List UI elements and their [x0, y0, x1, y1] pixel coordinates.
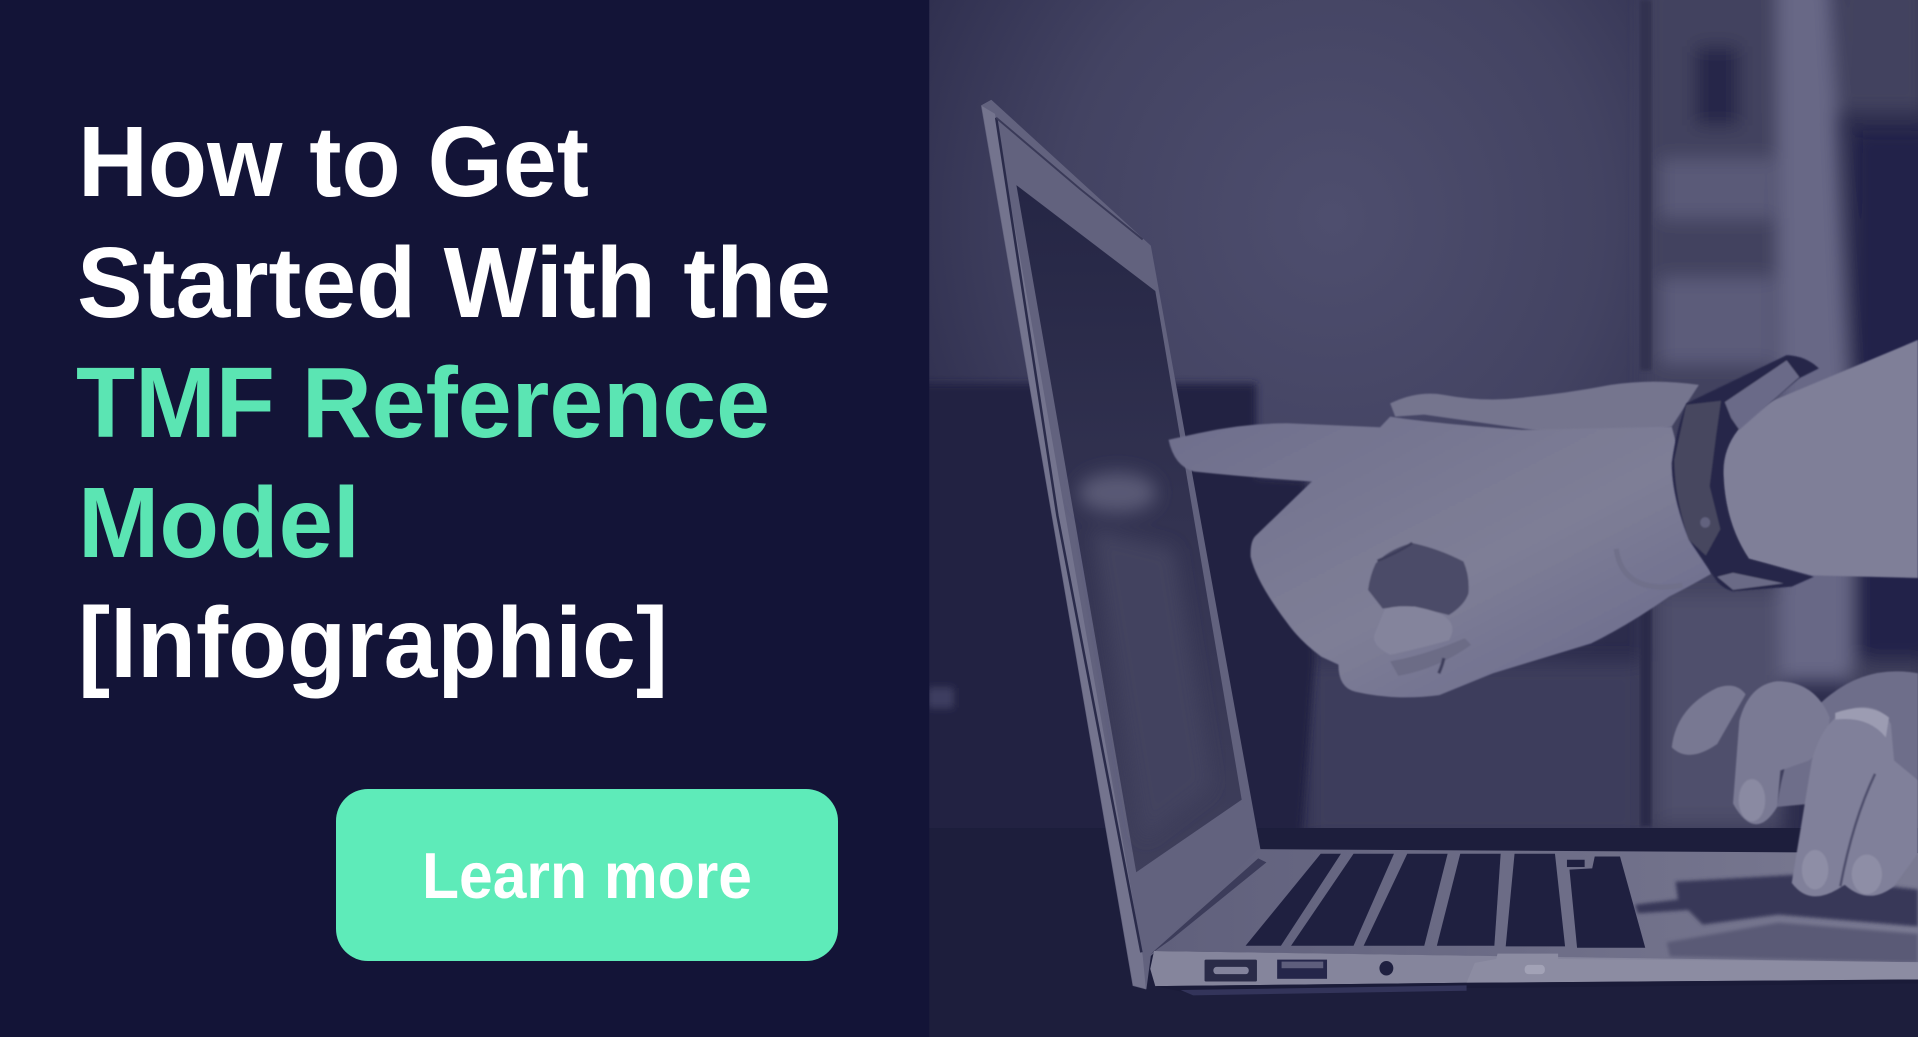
- trackpad and hand shadow: [1635, 875, 1918, 963]
- blurred room background: [915, 0, 1918, 1037]
- laptop lid: [982, 101, 1260, 989]
- forearm: [1722, 340, 1918, 578]
- panel: title and call to action: [0, 0, 928, 1037]
- title: Model: [78, 467, 360, 579]
- hinge shadow: [1150, 858, 1266, 954]
- title: [76, 106, 831, 699]
- title: [Infographic]: [78, 587, 668, 699]
- title: TMF Reference: [76, 347, 770, 459]
- title: How to Get: [78, 106, 589, 218]
- laptop screen: [1016, 185, 1242, 873]
- laptop deck: [1155, 849, 1918, 963]
- title: Started With the: [77, 227, 831, 339]
- keyboard: [1246, 854, 1645, 948]
- lower hand on trackpad: [1672, 671, 1918, 896]
- back hand: [1390, 382, 1699, 435]
- laptop front edge and ports: [1150, 951, 1918, 995]
- button: learn more: [336, 789, 838, 961]
- button: learn more: Learn more: [422, 839, 752, 912]
- pointing hand: [1169, 417, 1711, 697]
- lid bottom bezel: [1135, 800, 1259, 954]
- wristband: [1672, 355, 1819, 591]
- panel: duotone photo of hands pointing at a laptop: [928, 0, 1918, 1037]
- laptop: [982, 101, 1918, 995]
